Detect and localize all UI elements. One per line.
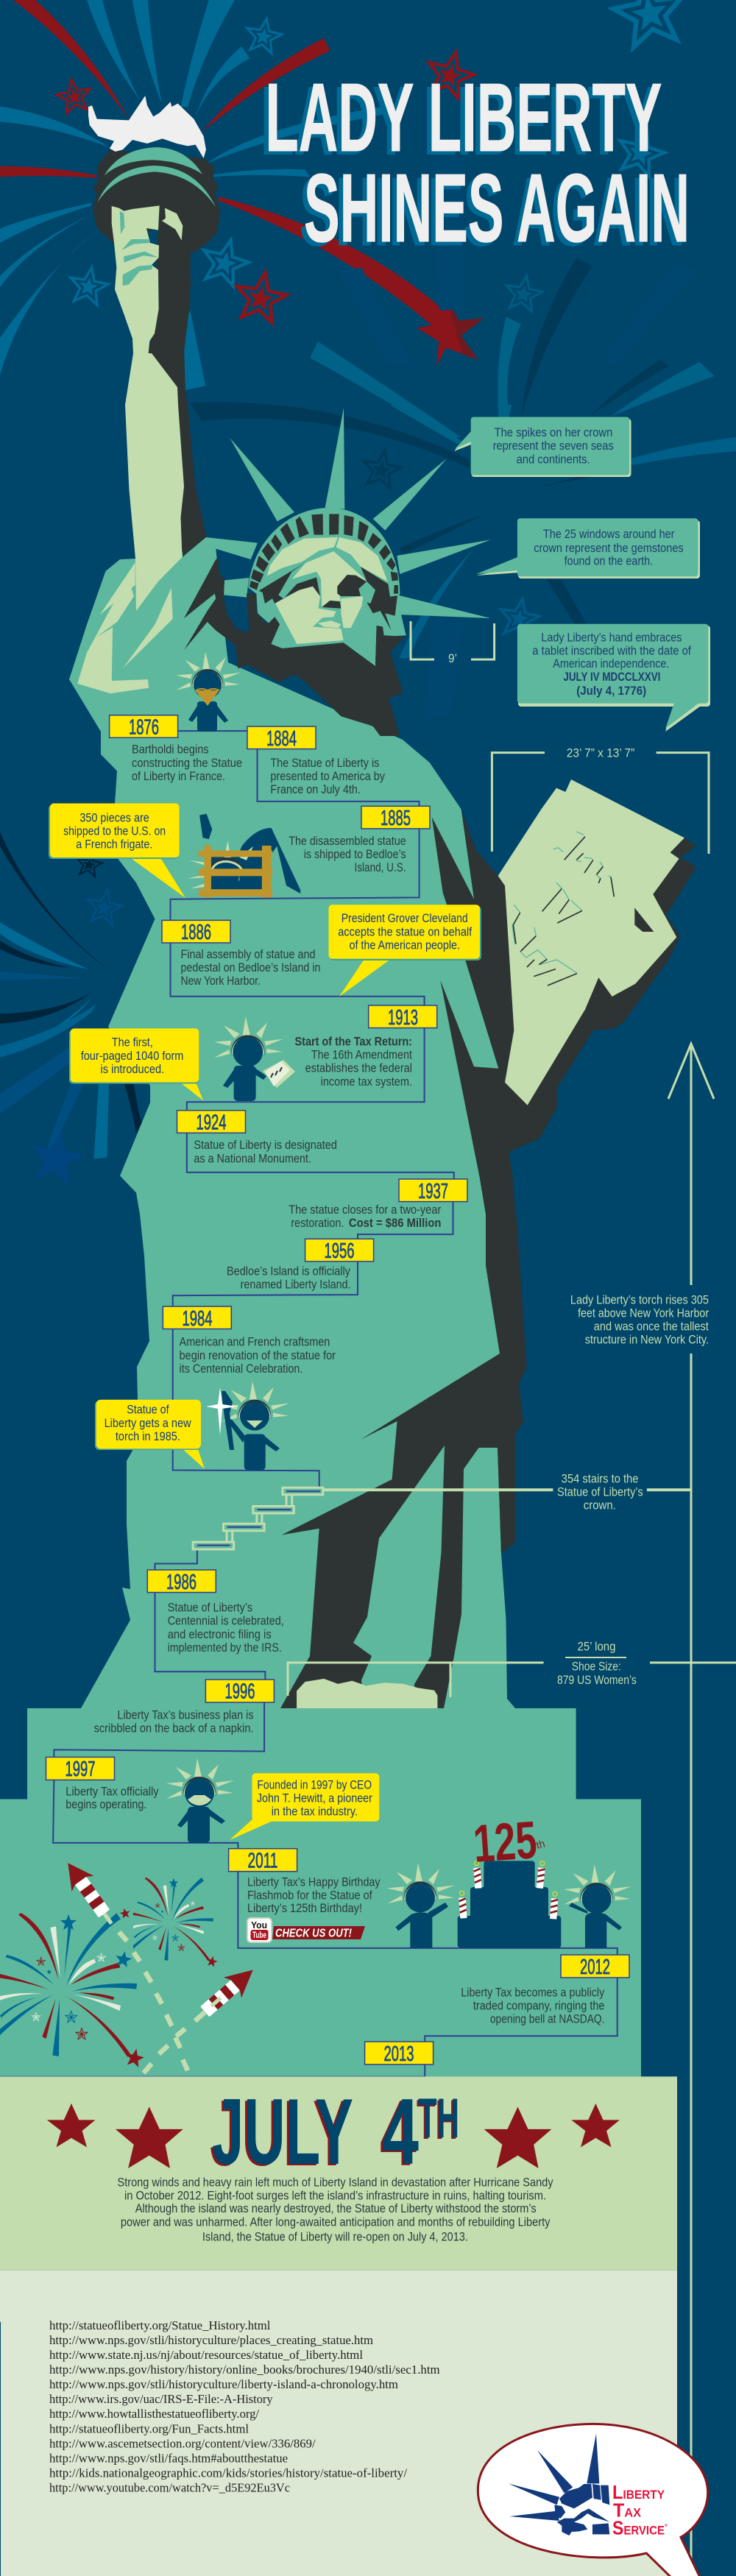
timeline: 2011: 2011 (247, 1849, 278, 1872)
neck and hair shadow (184, 558, 406, 736)
panel: July 4th (0, 2076, 677, 2271)
text block: Island, the Statue of Liberty will re-open on July 4, 2013. (202, 2231, 468, 2244)
figure: left (410, 1912, 432, 1948)
callout: crown windows: The 25 windows around her (543, 528, 675, 541)
timeline: 1937: The statue closes for a two-year (289, 1203, 442, 1217)
callout: first 1040 form: four-paged 1040 form (81, 1050, 183, 1063)
callout: tablet inscription: a tablet inscribed with the date of (532, 644, 691, 657)
timeline: 1876: constructing the Statue (132, 757, 242, 770)
timeline: 1996: Liberty Tax’s business plan is (118, 1709, 253, 1722)
badge: YouTube check us out: You (251, 1919, 267, 1931)
figure: new torch (206, 1381, 289, 1471)
timeline: 1937: restoration. (291, 1217, 344, 1230)
timeline: 1956: 1956 (324, 1239, 355, 1263)
source list: http://www.youtube.com/watch?v=_d5E92Eu3Vc (49, 2480, 290, 2495)
rays: torch burst (0, 0, 715, 439)
timeline: 1984: its Centennial Celebration. (180, 1362, 302, 1376)
flame (88, 96, 206, 158)
text block: in October 2012. Eight-foot surges left the island’s infrastructure in ruins, halting tourism. (124, 2189, 546, 2202)
callout: President Cleveland (328, 905, 481, 997)
rocket left (57, 1855, 122, 1931)
timeline: 1996: 1996 (225, 1680, 255, 1704)
ruler: 9 feet: 9’ (448, 652, 457, 665)
callout: new torch: Statue of (127, 1404, 169, 1417)
logo wordmark: TAX (613, 2499, 642, 2521)
timeline: 1885: is shipped to Bedloe’s (304, 848, 406, 861)
hand (112, 205, 160, 353)
timeline: 1913: income tax system. (321, 1075, 412, 1089)
ruler: shoe size: 879 US Women’s (557, 1674, 637, 1687)
head and crown (184, 408, 491, 736)
timeline: 2012: traded company, ringing the (473, 2000, 605, 2013)
timeline: 1986 (147, 1570, 284, 1655)
timeline: 1956: renamed Liberty Island. (241, 1278, 351, 1291)
timeline: 1924 (177, 1111, 337, 1166)
timeline: 1913: 1913 (388, 1006, 418, 1030)
source list: http://statueofliberty.org/Fun_Facts.html (49, 2421, 249, 2435)
callout: crown windows: found on the earth. (565, 554, 653, 567)
label: stairs: 354 stairs to the (562, 1472, 638, 1485)
robe shadow and tablet backing (417, 810, 696, 1227)
timeline: 1956: Bedloe’s Island is officially (227, 1264, 351, 1278)
ruler: tablet size (492, 746, 709, 854)
callout: first 1040 form (69, 1028, 203, 1100)
timeline: 1886: Final assembly of statue and (181, 948, 315, 961)
ruler: shoe size: Shoe Size: (572, 1660, 621, 1674)
badge: YouTube check us out (247, 1918, 365, 1942)
callout: crown spikes: The spikes on her crown (495, 426, 612, 439)
callout: tablet inscription: Lady Liberty’s hand embraces (541, 631, 682, 645)
stairs (193, 1487, 691, 1549)
timeline: 1986: 1986 (166, 1571, 197, 1594)
ruler: shoe size (288, 1640, 736, 1697)
logo wordmark: SERVICE (612, 2516, 665, 2538)
timeline: 1884: The Statue of Liberty is (270, 757, 379, 770)
label: 125th: 125 (472, 1811, 539, 1874)
timeline: 1886: New York Harbor. (181, 974, 261, 988)
timeline: 1876: of Liberty in France. (132, 770, 225, 783)
callout: 350 pieces: shipped to the U.S. on (63, 824, 166, 838)
callout: crown spikes: and continents. (517, 453, 590, 467)
timeline: 1876: 1876 (129, 715, 159, 739)
callout: founded 1997: in the tax industry. (272, 1805, 358, 1818)
label: stairs: crown. (584, 1499, 616, 1512)
callout: first 1040 form: is introduced. (100, 1063, 164, 1076)
timeline: 1884: presented to America by (270, 770, 386, 783)
ruler: 9 feet (411, 621, 495, 665)
rocket right (196, 1960, 262, 2022)
timeline: 1924: 1924 (196, 1111, 227, 1135)
timeline: 1885: Island, U.S. (355, 861, 406, 874)
source list (49, 2318, 440, 2495)
title (261, 63, 690, 266)
shoe (297, 1679, 437, 1708)
timeline: 1986: Centennial is celebrated, (168, 1615, 284, 1628)
ruler: shoe size: 25’ long (577, 1640, 615, 1653)
callout: crown windows: crown represent the gemstones (534, 542, 684, 555)
rocket trails (119, 1932, 205, 2073)
source list: http://www.ascemetsection.org/content/view/336/869/ (49, 2436, 316, 2450)
timeline: 1956 (227, 1239, 374, 1291)
timeline: 2011: Flashmob for the Statue of (247, 1889, 372, 1902)
birthday cake scene (387, 1861, 631, 1948)
panel: sources (0, 2271, 677, 2576)
timeline: 1924: as a National Monument. (194, 1153, 311, 1166)
source list: http://www.nps.gov/history/history/online_books/brochures/1940/stli/sec1.htm (49, 2363, 440, 2377)
timeline: 1886: pedestal on Bedloe’s Island in (181, 961, 321, 974)
timeline: 1884: 1884 (266, 727, 297, 751)
timeline: 1984: American and French craftsmen (180, 1336, 330, 1349)
callout: founded 1997: John T. Hewitt, a pioneer (257, 1792, 372, 1805)
timeline: 1937: 1937 (418, 1180, 448, 1203)
small burst (133, 1878, 219, 1967)
stars (47, 2103, 620, 2168)
stars (54, 77, 93, 114)
heading: July 4th: TH (417, 2089, 458, 2151)
callout: crown windows (476, 518, 700, 578)
icon: statue in crate (187, 814, 300, 897)
sparkle (206, 1387, 237, 1435)
timeline: 1984 (163, 1306, 336, 1376)
label: 125th: th (535, 1837, 546, 1851)
timeline: 1924: Statue of Liberty is designated (194, 1139, 337, 1152)
timeline: 2011 (229, 1849, 381, 1915)
face (267, 537, 388, 644)
rays: lower left burst (0, 832, 142, 1159)
logo wordmark: ® (665, 2523, 668, 2528)
timeline: 1937 (289, 1179, 467, 1230)
text: torch height (570, 1293, 710, 1346)
source list: http://www.nps.gov/stli/faqs.htm#aboutthestatue (49, 2451, 288, 2465)
timeline: 2012: 2012 (580, 1956, 610, 1979)
statue of liberty (0, 96, 696, 2077)
height arrow (668, 1044, 714, 2576)
text: torch height: and was once the tallest (594, 1320, 709, 1334)
callout: 350 pieces: 350 pieces are (79, 811, 149, 824)
timeline connector lines (0, 731, 618, 2077)
text block (118, 2176, 553, 2244)
figure: right (585, 1912, 606, 1948)
callout: new torch (95, 1400, 205, 1469)
large burst (0, 1913, 146, 2068)
timeline: 1996 (94, 1680, 274, 1735)
timeline: 2013: 2013 (384, 2042, 414, 2066)
timeline: 2011: Liberty Tax’s Happy Birthday (247, 1876, 381, 1889)
raised arm (77, 228, 207, 693)
callout: President Cleveland: President Grover Cleveland (342, 912, 468, 925)
robe body and pedestal (0, 537, 641, 2077)
source list: http://www.nps.gov/stli/historyculture/places_creating_statue.htm (49, 2333, 373, 2347)
tablet (498, 779, 684, 1105)
background firework rays and stars (0, 0, 736, 1187)
sleeve highlights (77, 562, 173, 693)
logo wordmark: LIBERTY (612, 2481, 665, 2503)
candles (459, 1861, 559, 1919)
callout: 350 pieces (49, 804, 185, 898)
text block: Although the island was nearly destroyed, the Statue of Liberty withstood the storm’s (135, 2202, 537, 2215)
callout: founded 1997: Founded in 1997 by CEO (258, 1778, 372, 1791)
timeline: 1997 (46, 1757, 159, 1811)
timeline: 1986: implemented by the IRS. (168, 1641, 282, 1655)
timeline: 2012: opening bell at NASDAQ. (490, 2012, 605, 2025)
label: stairs: Statue of Liberty’s (557, 1486, 643, 1499)
figure: tax return (214, 1016, 295, 1101)
timeline: 1884: France on July 4th. (270, 783, 361, 796)
ruler: tablet size: 23’ 7” x 13’ 7” (567, 746, 634, 760)
timeline: 1986: and electronic filing is (168, 1628, 272, 1641)
rays: crown area (190, 403, 736, 718)
leg shadow (280, 1214, 527, 1708)
timeline: 1884 (247, 726, 386, 796)
callout: President Cleveland: accepts the statue on behalf (338, 925, 473, 938)
label: stairs (557, 1472, 643, 1512)
timeline: 1997: 1997 (65, 1758, 96, 1781)
timeline: 1885 (289, 806, 430, 874)
timeline: 1913 (294, 1005, 437, 1089)
cake (458, 1861, 561, 1948)
timeline: 1937: Cost = $86 Million (349, 1217, 442, 1230)
timeline: 1876: Bartholdi begins (132, 743, 209, 756)
figure: Bartholdi (176, 651, 241, 732)
fireworks and rockets (0, 1855, 262, 2073)
source list: http://www.irs.gov/uac/IRS-E-File:-A-History (49, 2392, 273, 2406)
timeline: 1997: begins operating. (66, 1798, 146, 1811)
timeline: 1997: Liberty Tax officially (66, 1786, 159, 1799)
timeline: 1886 (162, 920, 321, 988)
callout: tablet inscription: JULY IV MDCCLXXVI (563, 670, 660, 684)
timeline: 2011: Liberty’s 125th Birthday! (247, 1902, 362, 1915)
crown windows (250, 514, 398, 594)
torch (88, 96, 220, 353)
source list: http://statueofliberty.org/Statue_History.html (49, 2318, 271, 2332)
callout: tablet inscription: American independence. (553, 657, 669, 670)
source list: http://kids.nationalgeographic.com/kids/stories/history/statue-of-liberty/ (49, 2466, 407, 2480)
heading: July 4th: 4 (380, 2081, 417, 2185)
timeline: 1876 (110, 715, 242, 783)
timeline: 2012 (461, 1955, 629, 2025)
callout: tablet inscription: (July 4, 1776) (576, 684, 646, 698)
logo crown (509, 2434, 609, 2536)
heading: July 4th: JULY (210, 2081, 351, 2185)
callout: tablet inscription (517, 624, 710, 732)
heading: July 4th: 4 (382, 2079, 419, 2184)
timeline: 1996: scribbled on the back of a napkin. (94, 1722, 253, 1735)
callout: founded 1997 (230, 1773, 379, 1840)
source list: http://www.state.nj.us/nj/about/resources/statue_of_liberty.html (49, 2348, 363, 2362)
callout: new torch: Liberty gets a new (105, 1417, 191, 1430)
text block: power and was unharmed. After long-awaited anticipation and months of rebuilding Liberty (121, 2215, 551, 2229)
callout: 350 pieces: a French frigate. (76, 838, 152, 851)
timeline: 1885: The disassembled statue (289, 835, 406, 848)
text block: Strong winds and heavy rain left much of Liberty Island in devastation after Hurricane Sandy (118, 2176, 553, 2189)
timeline: 1984: begin renovation of the statue for (180, 1349, 336, 1362)
text: torch height: structure in New York City. (585, 1333, 709, 1346)
callout: first 1040 form: The first, (112, 1036, 153, 1050)
heading: July 4th: TH (418, 2087, 459, 2150)
timeline: 1986: Statue of Liberty’s (168, 1602, 252, 1615)
timeline: 2012: Liberty Tax becomes a publicly (461, 1986, 605, 2000)
timeline: 1913: establishes the federal (305, 1062, 412, 1075)
callout: President Cleveland: of the American people. (349, 938, 460, 952)
logo wordmark (612, 2481, 668, 2538)
timeline: 1885: 1885 (381, 807, 411, 830)
badge: YouTube check us out: CHECK US OUT! (275, 1927, 353, 1940)
callout: new torch: torch in 1985. (116, 1430, 180, 1443)
callout: crown spikes (454, 417, 631, 477)
timeline: 1984: 1984 (183, 1307, 212, 1331)
heading: July 4th: JULY (212, 2079, 353, 2184)
source list: http://www.nps.gov/stli/historyculture/liberty-island-a-chronology.htm (49, 2377, 398, 2391)
source list: http://www.howtallisthestatueofliberty.org/ (49, 2407, 259, 2421)
text: torch height: Lady Liberty’s torch rises 305 (570, 1293, 709, 1306)
timeline: 1886: 1886 (181, 921, 211, 944)
timeline: 1913: The 16th Amendment (311, 1049, 412, 1062)
callout: crown spikes: represent the seven seas (493, 439, 614, 453)
logo speech bubble (478, 2424, 708, 2576)
timeline: 1913: Start of the Tax Return: (294, 1036, 412, 1049)
timeline: 2013 (365, 2042, 434, 2066)
text: torch height: feet above New York Harbor (578, 1307, 710, 1320)
figure: John Hewitt (166, 1758, 234, 1843)
badge: YouTube check us out: Tube (252, 1931, 266, 1940)
